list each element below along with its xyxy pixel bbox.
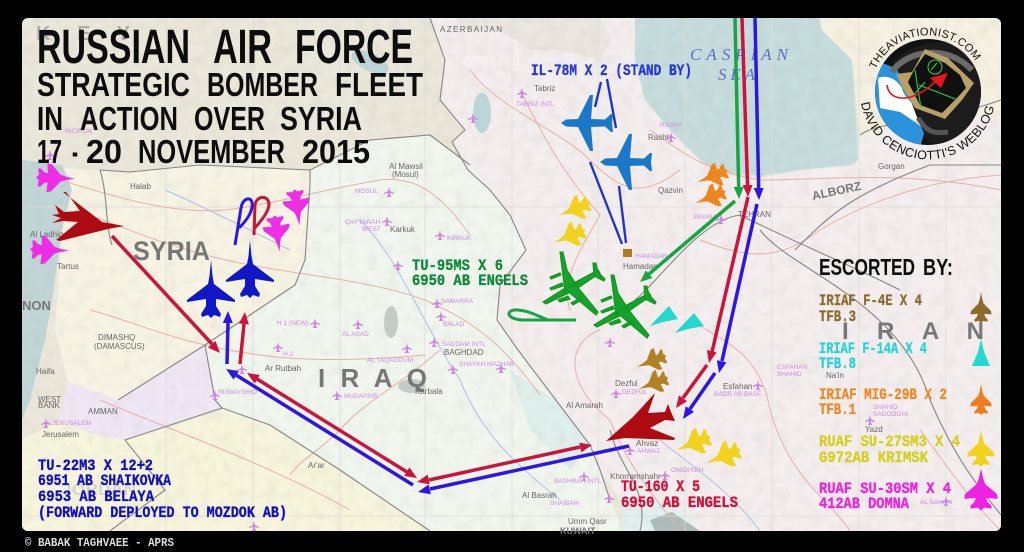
airfield markers: JERUSALEM	[52, 420, 91, 427]
airfield markers: BALAD	[443, 321, 465, 328]
airfield markers: OMIDIYEH	[671, 467, 703, 474]
map place labels: AMMAN	[88, 407, 118, 416]
map place labels: Yazd	[865, 425, 883, 434]
logo: The Aviationist badge	[861, 28, 994, 160]
label: TU-95MS: 6950 AB ENGELS	[412, 272, 528, 290]
label: TU-160	[621, 478, 738, 512]
airfield markers: H 2	[283, 351, 294, 358]
legend heading: BY:	[923, 254, 953, 280]
label: TU-160: 6950 AB ENGELS	[621, 494, 738, 512]
title: 20	[86, 133, 122, 170]
map place labels: Jerusalem	[42, 430, 79, 439]
map place labels: JORDAN	[62, 480, 136, 499]
map place labels: Al Ladhiq	[30, 230, 63, 239]
map place labels: Khorramshahr	[610, 472, 661, 481]
legend: F-14A: TFB.8	[819, 355, 856, 373]
map place labels: Esfahan	[723, 382, 752, 391]
map place labels: Tartus	[57, 262, 79, 271]
airfield markers: AL SAHAN	[920, 499, 952, 506]
airfield markers: WEST	[362, 226, 381, 233]
map place labels: Al Amarah	[566, 401, 603, 410]
label: TU-95MS	[412, 257, 528, 290]
map place labels: K E Y	[36, 23, 131, 45]
map place labels: Al Mawsil	[389, 162, 423, 171]
map place labels: Hamadan	[623, 262, 658, 271]
map place labels: Rasht	[648, 133, 670, 142]
aircraft: IL-78 tankers	[561, 95, 652, 190]
legend: MiG-29B	[819, 384, 992, 419]
map place labels: AZERBAIJAN	[440, 25, 502, 34]
map place labels: Gorgan	[878, 162, 905, 171]
airfield markers: SAMARRA	[441, 298, 474, 305]
legend: F-4E	[819, 292, 992, 326]
map place labels: ALBORZ	[811, 179, 863, 203]
title: NOVEMBER	[138, 133, 285, 170]
map place labels: Qazvin	[658, 186, 683, 195]
airfield markers: MOSUL	[355, 188, 378, 195]
map place labels: SEA	[718, 65, 756, 84]
map place labels: WEST	[38, 395, 61, 404]
title: 2015	[302, 133, 370, 170]
title: AIR	[213, 21, 272, 74]
legend: Su-30SM: RUAF SU-30SM X 4	[819, 480, 951, 498]
airfield markers: HAMADAN	[635, 253, 668, 260]
escorts: brown F-4E	[633, 345, 672, 400]
airfield markers: INCIRLIK	[65, 128, 93, 135]
airfield markers: SHAHID	[873, 404, 898, 411]
map place labels: Tabriz	[534, 84, 555, 93]
escorts: magenta Su-30SM	[30, 163, 313, 265]
airfield markers: RASHT	[660, 122, 682, 129]
label: TU-22M3: (FORWARD DEPLOYED TO MOZDOK AB)	[38, 504, 287, 522]
airfield markers: SADOOGHI	[873, 411, 908, 418]
airfield markers: ESFAHAN	[777, 364, 808, 371]
label: IL-78M: IL-78M X 2 (STAND BY)	[531, 62, 692, 80]
map place labels: NON	[22, 298, 51, 313]
Hamadan base marker	[623, 249, 632, 257]
map place labels: Karbala	[415, 387, 443, 396]
lakes	[348, 45, 491, 133]
map place labels: (DAMASCUS)	[94, 342, 145, 351]
route arrows: green	[509, 18, 744, 320]
airfield markers: H 1 (NEW)	[277, 320, 308, 327]
airfield markers: BADR AB BASE	[714, 391, 762, 398]
legend: Su-30SM	[819, 468, 998, 513]
route arrows: red	[112, 18, 753, 484]
airfield markers: AL TAQADDUM	[367, 357, 413, 364]
logo: The Aviationist badge: THEAVIATIONIST.COM	[868, 28, 981, 67]
title: SYRIA	[280, 100, 362, 137]
logo: The Aviationist badge: DAVID CENCIOTTI'S WEBLOG	[861, 102, 994, 160]
map place labels: CASPIAN	[690, 45, 790, 64]
airfield markers: SHAYKH MAZHAR	[459, 361, 515, 368]
label: TU-95MS: TU-95MS X 6	[412, 257, 503, 275]
map place labels: I R A N	[842, 318, 984, 345]
aircraft: Tu-160 near Ahvaz	[606, 393, 675, 441]
title: BOMBER	[207, 66, 318, 103]
legend: F-4E: TFB.3	[819, 308, 856, 326]
map place labels: Umm Qasr	[568, 517, 607, 526]
map place labels: Halab	[130, 182, 151, 191]
airfield markers: KIRKUK	[447, 235, 472, 242]
title: 17	[37, 133, 62, 170]
label: TU-22M3: 6953 AB BELAYA	[38, 488, 154, 506]
legend: MiG-29B: TFB.1	[819, 401, 856, 419]
title: FLEET	[335, 66, 423, 103]
escorts: orange MiG-29	[691, 159, 732, 214]
airfield markers: RUWAYSHID	[218, 389, 257, 396]
airfield markers: DEZFUL	[622, 389, 648, 396]
map place labels: Al Basrah	[522, 491, 557, 500]
legend: F-4E: IRIAF F-4E X 4	[819, 292, 922, 310]
legend: Su-27SM3: G972AB KRIMSK	[819, 449, 928, 467]
airfield markers: AL ASAD	[342, 331, 369, 338]
legend heading: ESCORTED	[819, 254, 915, 280]
escorts: yellow Su-27	[549, 191, 746, 476]
aircraft: Tu-22M3 bombers	[187, 240, 274, 318]
legend: Su-30SM: 412AB DOMNA	[819, 495, 909, 513]
IL-78 stand-by routes	[590, 79, 626, 244]
airfield markers: SHAIBAH	[550, 500, 579, 507]
route arrows: blue	[223, 18, 764, 494]
map place labels: KUWAIT	[560, 526, 596, 536]
label: TU-160: TU-160 X 5	[621, 478, 700, 496]
label: TU-22M3	[38, 457, 287, 522]
aircraft: Tu-95MS bombers	[543, 252, 656, 338]
airfield markers: QAYYARAH	[345, 219, 380, 226]
title: IN	[37, 100, 63, 137]
airfield markers: SADDAM INTL	[442, 341, 486, 348]
airfield markers	[41, 88, 952, 531]
airfield markers: SHAHID	[777, 371, 802, 378]
legend: Su-27SM3	[819, 430, 995, 467]
map place labels: Haifa	[36, 367, 55, 376]
map place labels: Ahvaz	[636, 439, 658, 448]
map place labels: Na'in	[826, 371, 844, 380]
legend: F-14A: IRIAF F-14A X 4	[819, 340, 927, 358]
map place labels: Ar Rutbah	[265, 364, 301, 373]
map place labels: TEHRAN	[738, 210, 771, 219]
legend: MiG-29B: IRIAF MIG-29B X 2	[819, 386, 947, 404]
map place labels: Karkuk	[390, 225, 416, 234]
label: TU-22M3: TU-22M3 X 12+2	[38, 457, 153, 475]
title	[37, 21, 423, 170]
copyright footer: © BABAK TAGHVAEE - APRS	[25, 537, 174, 550]
airfield markers: TABRIZ INTL	[516, 101, 555, 108]
map place labels: SYRIA	[133, 236, 210, 266]
title: OVER	[194, 100, 265, 137]
airfield markers: MUDAYSIS	[344, 393, 378, 400]
escorts: cyan F-14	[650, 306, 704, 333]
title: RUSSIAN	[37, 21, 190, 74]
map place labels: DIMASHQ	[98, 333, 135, 342]
legend: F-14A	[819, 339, 990, 373]
title: STRATEGIC	[37, 66, 190, 103]
map place labels: BAGHDAD	[444, 348, 484, 357]
map place labels: I R A Q	[318, 363, 427, 393]
title: ACTION	[80, 100, 178, 137]
map place labels: (Mosul)	[392, 170, 419, 179]
airfield markers: PAYAM	[694, 214, 715, 221]
map place labels: Ar'ar	[308, 461, 325, 470]
airfield markers: AHWAZ	[637, 448, 660, 455]
title: FORCE	[295, 21, 413, 74]
legend: Su-27SM3: RUAF SU-27SM3 X 4	[819, 433, 960, 451]
map place labels: BANK	[38, 401, 60, 410]
label: TU-22M3: 6951 AB SHAIKOVKA	[38, 472, 171, 490]
aircraft: Tu-160 over Syria coast	[52, 192, 124, 241]
map place labels: Dezful	[615, 379, 638, 388]
airfield markers: BASHRAH INTL	[554, 478, 602, 485]
title: -	[72, 133, 78, 170]
